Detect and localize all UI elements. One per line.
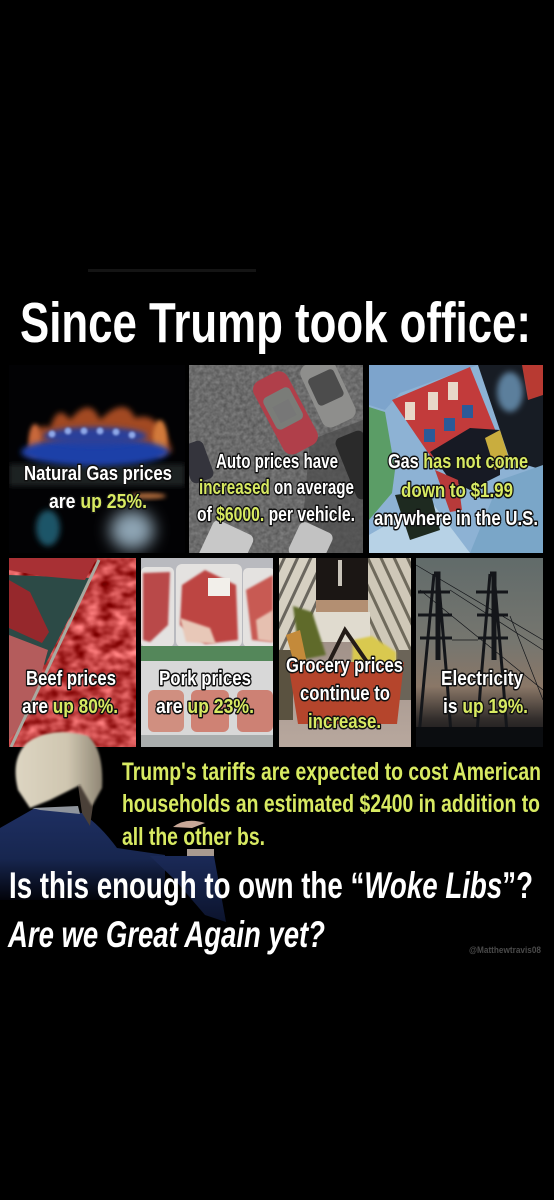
label: pork: Pork prices — [159, 668, 251, 690]
label: pork: are up 23%. — [156, 696, 254, 718]
label: grocery: Grocery prices — [286, 655, 403, 677]
label: beef: are up 80%. — [22, 696, 118, 718]
label: natural gas: Natural Gas prices — [24, 463, 172, 485]
label: natural gas — [24, 463, 172, 513]
panel: electricity — [416, 558, 543, 747]
figure: man seen from behind — [0, 732, 226, 922]
label: auto prices: Auto prices have — [216, 451, 338, 473]
label: grocery: continue to — [300, 683, 390, 705]
label: gas pump: down to $1.99 — [401, 480, 513, 502]
panel: auto prices — [189, 365, 363, 553]
closing question: Are we Great Again yet? — [7, 914, 325, 955]
cuff — [187, 849, 214, 856]
label: auto prices: increased on average — [199, 477, 354, 499]
label: grocery — [286, 655, 403, 733]
label: gas pump: Gas has not come — [388, 451, 528, 473]
watermark: @Matthewtravis08 — [469, 945, 541, 955]
label: electricity: is up 19%. — [443, 696, 528, 718]
label: beef: Beef prices — [26, 668, 116, 690]
hand — [173, 821, 205, 828]
panel: gas pump — [369, 365, 543, 553]
label: electricity: Electricity — [441, 668, 524, 690]
tariff text: all the other bs. — [122, 823, 265, 851]
label: grocery: increase. — [308, 711, 381, 733]
label: beef — [22, 668, 118, 718]
label: pork — [156, 668, 254, 718]
label: auto prices — [197, 451, 355, 526]
question text: Is this enough to own the “Woke Libs”? — [9, 865, 533, 906]
panel: beef — [9, 558, 136, 747]
label: auto prices: of $6000. per vehicle. — [197, 504, 355, 526]
panel: pork — [141, 558, 275, 747]
panel: natural gas — [9, 402, 185, 553]
panel: grocery — [279, 558, 411, 747]
tariff text — [122, 758, 541, 851]
faint cut-off strip above title — [88, 269, 256, 272]
label: electricity — [441, 668, 528, 718]
label: natural gas: are up 25%. — [49, 491, 147, 513]
label: gas pump — [374, 451, 538, 530]
